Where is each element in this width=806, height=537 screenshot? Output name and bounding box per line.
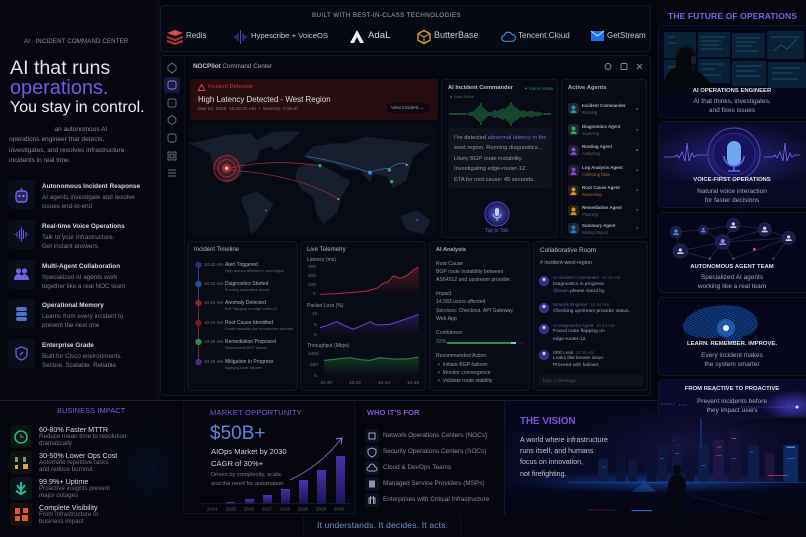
- agent rows: Routing Agent: [582, 144, 612, 149]
- panel: market opportunity: CAGR of 30%+: [211, 459, 263, 468]
- panel: collaborative room: edge-router-12.: [553, 337, 587, 342]
- feature: real-time voice: Get instant answers.: [42, 243, 99, 250]
- feature: autonomous incident response: [8, 180, 140, 210]
- agent rows: Writing Report: [582, 230, 608, 234]
- card: autonomous agent team: working like a real team: [698, 283, 766, 290]
- panel: incident timeline: 10:46 AM: [204, 359, 223, 364]
- audience row: NOCs: [365, 429, 500, 443]
- dashboard title: NOCPilot Command Center: [193, 63, 272, 70]
- logo: ButterBase: ButterBase: [434, 30, 479, 40]
- active nav item: [164, 77, 180, 93]
- audience row: SOCs: Security Operations Centers (SOCs): [383, 448, 486, 455]
- timeline rail: [195, 262, 202, 366]
- card: autonomous agent team: [658, 212, 806, 293]
- feature: multi-agent: Multi-Agent Collaboration: [42, 263, 120, 270]
- panel: active agents: Active Agents: [568, 85, 606, 91]
- confidence bar: [447, 342, 523, 344]
- agent rows: [568, 103, 638, 235]
- metric: visibility: business impact: [39, 518, 83, 525]
- logo: ButterBase: [417, 30, 479, 44]
- left panel: product introduction: [0, 0, 159, 400]
- panel: incident timeline: Anomaly Detected: [225, 300, 266, 306]
- panel: incident timeline: Route instability due to upstream provider: [225, 326, 293, 330]
- panel: collaborative room: [533, 241, 648, 391]
- metric: faster MTTR: 60-80% Faster MTTR: [39, 425, 108, 434]
- waveform: [449, 102, 551, 126]
- metric: visibility: [10, 503, 98, 526]
- card: learn remember improve: the system smarter: [704, 361, 760, 368]
- card: reactive to proactive: Prevent incidents before: [697, 398, 767, 405]
- card: AI operations engineer: and fixes issues: [709, 107, 755, 114]
- agent rows: Analyzing: [582, 150, 600, 156]
- feature: autonomous incident response: Autonomous Incident Response: [42, 183, 140, 190]
- agent rows: Reasoning: [582, 192, 602, 196]
- tagline: [303, 516, 461, 536]
- panel: live telemetry: 5: [314, 323, 317, 328]
- heading: You stay in control.: [10, 99, 145, 116]
- incident banner: Incident Detected: [208, 84, 252, 90]
- logo: Hypescribe + VoiceOS: [234, 30, 328, 44]
- panel: AI incident commander: AI Incident Commander: [448, 85, 513, 91]
- metric: visibility: Complete Visibility: [39, 503, 98, 512]
- button: view incident: View Incident →: [391, 105, 424, 110]
- logo: Tencent Cloud: [501, 31, 570, 42]
- incident banner: [190, 79, 438, 120]
- metric: lower ops cost: 30-50% Lower Ops Cost: [39, 451, 117, 460]
- transcript box: west region. Running diagnostics...: [454, 145, 542, 151]
- panel: incident timeline: Remediation Proposed: [225, 339, 276, 345]
- image: microphone: [659, 126, 806, 181]
- metric: uptime: [10, 477, 110, 500]
- timeline entries: High latency detected in west region: [225, 268, 284, 272]
- panel: collaborative room: AI Diagnostics Agent 10:44 AM: [553, 323, 615, 328]
- feature: autonomous incident response: AI agents investigate and resolve: [42, 194, 135, 201]
- panel: collaborative room: Found route flapping on: [553, 329, 605, 334]
- image: engineer at screens: [661, 31, 806, 91]
- panel: AI analysis: AI Analysis: [436, 247, 466, 253]
- panel: AI incident commander: ● Voice Active: [450, 95, 474, 99]
- card: reactive to proactive: FROM REACTIVE TO PROACTIVE: [685, 386, 779, 392]
- panel: market opportunity: AIOps Market by 2030: [211, 447, 287, 456]
- intro paragraph: incidents in real time.: [9, 157, 70, 164]
- feature: enterprise grade: Built for Cisco environments.: [42, 353, 122, 360]
- panel: live telemetry: Latency (ms): [307, 257, 336, 263]
- panel: business impact: BUSINESS IMPACT: [57, 406, 125, 415]
- logo: GetStream: [590, 30, 646, 41]
- image: agent network: [670, 218, 796, 260]
- audience row: enterprises: Enterprises with Critical Infrastructure: [383, 496, 489, 503]
- panel: technology bar: [160, 5, 651, 52]
- feature: enterprise grade: [8, 339, 122, 369]
- panel: live telemetry: Live Telemetry: [307, 247, 346, 253]
- tagline: It understands. It decides. It acts.: [317, 520, 448, 530]
- avatars: [538, 276, 550, 360]
- image: sparkling horizon: [661, 391, 806, 417]
- agent rows: Running: [582, 110, 597, 114]
- panel: the vision: runs itself, and humans: [520, 447, 593, 455]
- panel: incident timeline: BGP flapping on edge router-12: [225, 306, 277, 310]
- audience row: cloud: [365, 461, 500, 475]
- panel: collaborative room: AI Incident Commander 10:43 AM: [553, 275, 620, 280]
- card: learn remember improve: [658, 297, 806, 376]
- voice active badge: ✦ Voice Active: [524, 86, 553, 91]
- feature: multi-agent: together like a real NOC team: [42, 283, 125, 290]
- audience row: MSPs: Managed Service Providers (MSPs): [383, 480, 485, 487]
- divider: bottom section: [0, 400, 658, 401]
- audience row: SOCs: [365, 445, 500, 459]
- bar chart: 2027: [262, 506, 273, 512]
- incident banner: Mar 24, 2025 10:42:31 AM • Severity: Critical: [198, 107, 298, 112]
- panel: the vision: focus on innovation,: [520, 458, 583, 466]
- panel: AI analysis: Confidence: [436, 330, 462, 336]
- feature: multi-agent: [8, 260, 125, 290]
- panel: live telemetry: 10: [312, 312, 317, 317]
- card: AI operations engineer: AI OPERATIONS ENGINEER: [693, 88, 771, 94]
- metric: faster MTTR: dramatically: [39, 440, 72, 447]
- panel: market opportunity: and the need for automation: [211, 481, 284, 487]
- card: voice-first operations: [658, 121, 806, 208]
- panel: market opportunity: MARKET OPPORTUNITY: [210, 408, 302, 417]
- timeline entries: 10:42 AM: [204, 262, 223, 267]
- feature: operational memory: [8, 299, 123, 329]
- icon: voice waveform: [14, 228, 28, 242]
- eyebrow label: AI INCIDENT COMMAND CENTER: [24, 38, 128, 45]
- feature: real-time voice: Real-time Voice Operations: [42, 223, 125, 230]
- panel: live telemetry: Packet Loss (%): [307, 303, 343, 309]
- card: voice-first operations: Natural voice interaction: [697, 188, 767, 195]
- feature: enterprise grade: Enterprise Grade: [42, 342, 94, 349]
- agent rows: Remediation Agent: [582, 205, 622, 210]
- card: autonomous agent team: AUTONOMOUS AGENT TEAM: [690, 264, 774, 270]
- panel: the vision: not firefighting.: [520, 470, 567, 478]
- panel: collaborative room: # incident-west-region: [540, 260, 592, 266]
- feature: real-time voice: [8, 220, 125, 250]
- panel: incident timeline: Root Cause Identified: [225, 320, 273, 326]
- panel: the vision: THE VISION: [520, 416, 576, 427]
- card: AI operations engineer: [658, 25, 806, 118]
- message input: Type a message...: [542, 378, 580, 383]
- bar chart: 2030: [334, 506, 345, 512]
- panel: collaborative room: Collaborative Room: [540, 247, 596, 254]
- panel: market opportunity: Driven by complexity, scale,: [211, 472, 282, 478]
- agent rows: Root Cause Agent: [582, 185, 620, 190]
- heading: AI that runs: [10, 57, 110, 79]
- intro paragraph: investigates, and resolves infrastructure: [9, 147, 124, 154]
- audience row: NOCs: Network Operations Centers (NOCs): [383, 432, 487, 439]
- metric: lower ops cost: and reduce burnout: [39, 466, 93, 473]
- button: view incident: [387, 103, 429, 113]
- panel: business impact: [10, 406, 126, 526]
- agent rows: Planning: [582, 212, 598, 216]
- panel: incident timeline: 10:45 AM: [204, 339, 223, 344]
- bar chart: [183, 400, 355, 514]
- panel: live telemetry: 10:40: [320, 381, 332, 386]
- heading: future of operations: THE FUTURE OF OPERATIONS: [668, 11, 797, 21]
- logo: Redis: Redis: [186, 31, 206, 40]
- card: autonomous agent team: Specialized AI agents: [701, 274, 763, 281]
- icon: database: [16, 307, 27, 321]
- transcript box: Investigating edge-router-12.: [454, 166, 527, 172]
- world map: [188, 132, 430, 234]
- panel: collaborative room: Diagnostics in progress.: [553, 282, 605, 287]
- panel: the vision: [515, 410, 665, 482]
- panel: AI analysis: Web App: [436, 316, 457, 322]
- metric: uptime: major outages: [39, 492, 78, 499]
- logo: AdaL: [350, 30, 390, 43]
- panel: who it's for: WHO IT'S FOR: [367, 408, 419, 417]
- agent rows: Diagnostics Agent: [582, 124, 620, 129]
- button: tap to talk: Tap to Talk: [485, 228, 509, 234]
- heading: built with: BUILT WITH BEST-IN-CLASS TECHNOLOGIES: [312, 12, 461, 19]
- panel: incident timeline: Running automated checks: [225, 288, 270, 292]
- transcript box: I've detected abnormal latency in the: [454, 135, 546, 141]
- bar chart: 2025: [226, 506, 237, 512]
- panel: live telemetry: 1000: [308, 352, 319, 357]
- logo: Hypescribe + VoiceOS: Hypescribe + VoiceOS: [251, 31, 328, 40]
- card: AI operations engineer: AI that thinks, investigates,: [693, 98, 771, 105]
- panel: market opportunity: $50B+: [210, 423, 265, 444]
- panel: live telemetry: 0: [314, 374, 317, 379]
- panel: AI analysis: Services: Checkout, API Gateway,: [436, 308, 514, 314]
- heading: operations.: [10, 77, 108, 99]
- panel: market opportunity: [183, 402, 355, 514]
- card: learn remember improve: Every incident makes: [701, 352, 763, 359]
- agent rows: Collecting Data: [582, 172, 610, 176]
- card: reactive to proactive: they impact users: [707, 407, 757, 414]
- message input: [539, 375, 643, 386]
- icon: robot: [15, 188, 28, 203]
- feature: enterprise grade: Secure. Scalable. Reliable.: [42, 362, 118, 369]
- card: learn remember improve: LEARN. REMEMBER. IMPROVE.: [687, 341, 777, 347]
- feature: real-time voice: Talk to your infrastructure.: [42, 234, 114, 241]
- agent rows: Log Analysis Agent: [582, 165, 623, 170]
- metric: faster MTTR: [10, 425, 126, 448]
- charts: [320, 266, 419, 372]
- metric: lower ops cost: [10, 451, 118, 474]
- agent rows: Summary Agent: [582, 223, 616, 228]
- icon: people: [14, 268, 29, 280]
- panel: live telemetry: 100: [308, 283, 316, 288]
- panel: live telemetry: [300, 241, 426, 391]
- image: glowing brain: [683, 305, 758, 342]
- metric: visibility: From infrastructure to: [39, 511, 98, 518]
- panel: collaborative room: Network Engineer 10:44 AM: [553, 302, 609, 307]
- panel: who it's for: [362, 401, 505, 515]
- icon: shield: [15, 346, 28, 361]
- transcript box: Likely BGP route instability.: [454, 156, 523, 162]
- panel: AI analysis: AS64512 and upstream provider.: [436, 277, 511, 283]
- panel: incident timeline: [187, 241, 298, 391]
- panel: incident timeline: 10:42 AM: [204, 281, 223, 286]
- panel: AI analysis: • Initiate BGP failover: [438, 362, 488, 368]
- incident banner: High Latency Detected - West Region: [198, 95, 331, 104]
- panel: AI analysis: Root Cause: [436, 261, 463, 267]
- button: tap to talk: [484, 202, 510, 234]
- transcript box: [448, 128, 552, 188]
- panel: the vision: A world where infrastructure: [520, 436, 608, 444]
- panel: live telemetry: 10:46: [407, 381, 419, 386]
- audience row: enterprises: [365, 493, 500, 507]
- panel: live telemetry: Throughput (Mbps): [307, 343, 350, 349]
- panel: AI analysis: Impact: [436, 291, 451, 297]
- transcript box: ETA for root cause: 45 seconds.: [454, 177, 535, 183]
- feature: operational memory: Operational Memory: [42, 302, 104, 309]
- audience row: MSPs: [365, 477, 500, 491]
- panel: live telemetry: 200: [308, 274, 316, 279]
- panel: incident timeline: 10:43 AM: [204, 300, 223, 305]
- metric: uptime: Proactive insights prevent: [39, 485, 110, 492]
- panel: AI analysis: BGP route instability between: [436, 269, 503, 275]
- metric: faster MTTR: Reduce mean time to resolution: [39, 433, 126, 440]
- panel: live telemetry: 500: [310, 363, 318, 368]
- panel: dashboard: [160, 55, 651, 396]
- logo: AdaL: AdaL: [368, 30, 390, 41]
- card: reactive to proactive: [658, 379, 806, 418]
- intro paragraph: [9, 126, 124, 164]
- panel: AI analysis: Recommended Action: [436, 353, 486, 359]
- panel: collaborative room: @team please stand by.: [553, 289, 605, 294]
- bar chart: 2026: [244, 506, 255, 512]
- dashboard sidebar: [161, 56, 185, 395]
- figure: silhouette: [666, 465, 688, 531]
- panel: live telemetry: 10:42: [349, 381, 361, 386]
- panel: AI analysis: [429, 241, 530, 391]
- panel: incident timeline: 10:44 AM: [204, 320, 223, 325]
- panel: live telemetry: 0: [313, 292, 316, 297]
- icon: warning: [198, 84, 206, 91]
- panel: AI analysis: 14,583 users affected: [436, 299, 485, 305]
- feature: multi-agent: Specialized AI agents work: [42, 274, 117, 281]
- feature: operational memory: prevent the next one: [42, 322, 99, 329]
- feature: autonomous incident response: issues end-to-end: [42, 203, 92, 210]
- panel: AI incident commander: [441, 79, 558, 238]
- panel: live telemetry: 10:44: [378, 381, 390, 386]
- feature: operational memory: Learns from every incident to: [42, 313, 123, 320]
- timeline entries: Alert Triggered: [225, 262, 258, 268]
- logo: GetStream: GetStream: [607, 31, 646, 40]
- panel: live telemetry: 300: [308, 265, 316, 270]
- panel: incident timeline: Recommend BGP failover: [225, 346, 268, 350]
- panel: incident timeline: Applying route failover...: [225, 366, 264, 370]
- audience row: cloud: Cloud & DevOps Teams: [383, 464, 451, 471]
- panel: AI analysis: 92%: [436, 339, 446, 345]
- panel: incident timeline: Diagnostics Started: [225, 281, 268, 287]
- agent rows: Scanning: [582, 130, 599, 136]
- metric: uptime: 99.9%+ Uptime: [39, 477, 88, 486]
- panel: collaborative room: Looks like known issue.: [553, 356, 604, 361]
- panel: collaborative room: SRE Lead 10:45 AM: [553, 350, 594, 355]
- heading: [10, 57, 145, 116]
- intro paragraph: operations engineer that detects,: [9, 136, 104, 143]
- panel: collaborative room: Proceed with failover.: [553, 363, 600, 368]
- panel: AI analysis: • Validate route stability: [438, 378, 493, 384]
- panel: incident timeline: Mitigation In Progress: [225, 359, 273, 365]
- panel: collaborative room: Checking upstream provider status.: [553, 309, 630, 314]
- panel: incident timeline: Incident Timeline: [194, 247, 239, 253]
- timeline entries: [204, 262, 284, 273]
- bar chart: 2024: [207, 506, 218, 512]
- panel: active agents: [561, 79, 647, 238]
- window controls: [604, 63, 642, 70]
- metric: lower ops cost: Automate repetitive tasks: [39, 459, 108, 466]
- bar chart: 2028: [298, 506, 309, 512]
- panel: AI analysis: • Monitor convergence: [438, 370, 491, 376]
- nav icons: [168, 62, 176, 176]
- bar chart: 2028: [280, 506, 291, 512]
- logo: Tencent Cloud: Tencent Cloud: [518, 31, 570, 40]
- bar chart: 2029: [316, 506, 327, 512]
- card: voice-first operations: VOICE-FIRST OPERATIONS: [693, 177, 771, 183]
- intro paragraph: an autonomous AI: [54, 126, 107, 133]
- card: voice-first operations: for faster decisions: [705, 197, 759, 204]
- logo: Redis: [167, 30, 206, 45]
- agent rows: Incident Commander: [582, 103, 626, 108]
- panel: live telemetry: 0: [314, 333, 317, 338]
